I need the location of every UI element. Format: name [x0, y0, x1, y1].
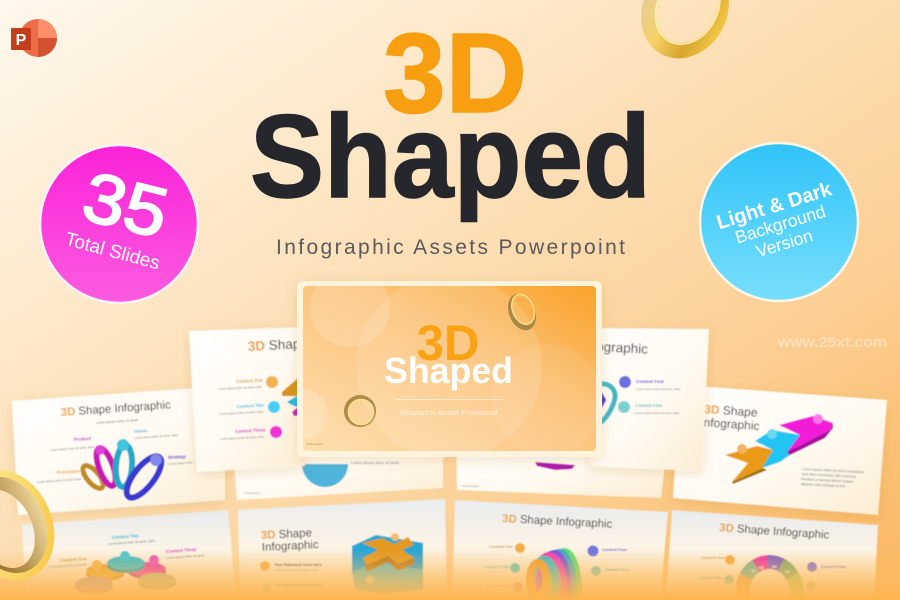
slide: product rings [12, 386, 225, 515]
slide: bottom row left [22, 510, 236, 600]
slide: content list left: Content Three [235, 427, 266, 434]
slide: bottom row right: Content Four [821, 564, 847, 569]
slide: lightning arrows: Infographic [700, 415, 760, 433]
slide: content list left: 3D Shape [247, 336, 308, 354]
slide: bottom row centre right: Content Five [605, 567, 630, 572]
badge: light and dark: Background [733, 201, 828, 247]
slide: bottom row right: 03 [759, 565, 764, 570]
slide: product rings: Lorem ipsum dolor sit amet [96, 418, 138, 425]
slide: bottom row centre right: Content One [489, 544, 514, 549]
slide: content list right: Content Four [636, 379, 664, 384]
slide: content list right: Content Five [635, 403, 663, 408]
slide: product rings: Lorem ipsum dolor sit amet, dolor [37, 477, 81, 484]
slide: product rings: Product [74, 436, 92, 442]
slide: product rings: 3D Shape Infographic [60, 399, 171, 419]
badge: 35 total slides [40, 145, 198, 303]
slide: hero 3D Shaped: Shaped [384, 350, 513, 391]
slide: bottom row centre right: Content Four [602, 547, 628, 552]
slide: product rings: Promotion [57, 468, 80, 475]
slide: product rings: Lorem ipsum dolor sit amet, dolor [50, 445, 94, 452]
subtitle: Infographic Assets Powerpoint [276, 236, 625, 259]
slide: content list left: Lorem ipsum dolor sit amet, dolor [219, 410, 264, 416]
slide: bottom row right: 05 [785, 569, 790, 574]
slide: bottom row centre left: Infographic [262, 539, 319, 554]
title: Shaped: Shaped [250, 91, 651, 223]
badge: 35 total slides: 35 [75, 157, 176, 253]
slide: bottom row right: 04 [772, 564, 777, 569]
watermark: www.25xt.com [777, 334, 887, 351]
slide: content list left: Lorem ipsum dolor sit amet, dolor [218, 385, 263, 391]
slide: bottom row left: Content Three [166, 547, 197, 554]
slide: bottom row left: Content Two [112, 533, 139, 540]
title: 3D: 3D [383, 10, 527, 136]
slide: content list right: Lorem ipsum dolor sit amet, dolor [635, 411, 680, 415]
ring: top gold [624, 0, 746, 74]
slide: lightning arrows: 3D Shape [704, 402, 758, 420]
slide: content list left: Content One [236, 378, 264, 384]
ring: hero lower [344, 395, 376, 427]
slide: bottom row centre left: Your Statement Goes Here [274, 583, 322, 587]
slide: bottom row left: Lorem ipsum dolor sit amet [166, 553, 205, 560]
slide: bottom row centre left: Your Statement Goes Here [274, 563, 322, 567]
slide: product rings: Vision [134, 428, 148, 434]
slide: product rings: Lorem ipsum dolor sit amet, dolor [134, 433, 178, 440]
slide: hero 3D Shaped: Infographic Assets Powerpoint [400, 408, 499, 417]
slide: middle row centre left [232, 430, 443, 500]
badge: 35 total slides: Total Slides [63, 229, 162, 274]
slide: bottom row centre left: 3D Shape [261, 527, 312, 542]
slide: bottom row left: Lorem ipsum dolor sit amet, dolor [108, 539, 156, 546]
slide: lightning arrows: aliquam erat volutpat ut wisi [801, 482, 846, 488]
ring: hero upper [503, 290, 541, 334]
slide: hero 3D Shaped: Presentation [306, 442, 323, 446]
slide: middle row centre right [456, 430, 668, 498]
slide: content list left: Content Two [237, 403, 264, 409]
slide: product rings: Lorem ipsum dolor [168, 460, 193, 466]
slide: content list right [590, 328, 709, 471]
slide: middle row centre left: Presentation [244, 491, 261, 495]
ring: bottom left gold [0, 455, 71, 595]
icon: PowerPoint logo [11, 19, 57, 57]
slide: bottom row right: 02 [751, 568, 756, 573]
slide: bottom row centre right: 3D Shape Infographic [502, 513, 613, 531]
fade: bottom orange [0, 550, 900, 600]
slide: content list right: Lorem ipsum dolor sit amet, dolor [636, 387, 681, 391]
slide: lightning arrows: sed diam nonummy nibh euismod [802, 472, 856, 479]
slide: lightning arrows: Lorem ipsum dolor sit amet consectetur [802, 467, 866, 474]
slide: lightning arrows: tincidunt ut laoreet dolore magna [801, 477, 853, 484]
slide: bottom row right [666, 510, 878, 600]
slide: product rings: Strategy [168, 454, 187, 460]
slide: bottom row centre left [238, 499, 447, 600]
slide: lightning arrows [673, 385, 887, 515]
slide: bottom row right: Content Two [699, 575, 723, 580]
slide: middle row centre right: Presentation [462, 484, 479, 488]
badge: light and dark: Version [753, 225, 815, 261]
slide: content list left [189, 327, 308, 472]
slide: hero 3D Shaped [278, 267, 604, 460]
badge: light and dark [700, 143, 858, 301]
slide: hero 3D Shaped: 3D [416, 315, 480, 371]
slide: bottom row right: 3D Shape Infographic [719, 522, 830, 542]
slide: bottom row left: Lorem ipsum dolor sit amet [48, 562, 87, 569]
slide: bottom row centre right: Content Three [485, 583, 513, 588]
slide: content list right: ographic [596, 339, 649, 357]
slide: middle row centre left: Lorem ipsum dolor sit amet [351, 460, 400, 465]
slide: bottom row centre left: Lorem ipsum dolor sit amet, dolor [274, 568, 319, 572]
slide: bottom row left: Content One [60, 556, 87, 563]
icon: PowerPoint logo: P [16, 32, 27, 49]
slide: bottom row centre right: Content Two [485, 564, 509, 569]
slide: bottom row right: Content One [701, 555, 726, 560]
slide: bottom row centre right [452, 500, 668, 600]
slide: content list left: Lorem ipsum dolor sit amet, dolor [220, 435, 265, 441]
badge: light and dark: Light & Dark [714, 178, 835, 234]
